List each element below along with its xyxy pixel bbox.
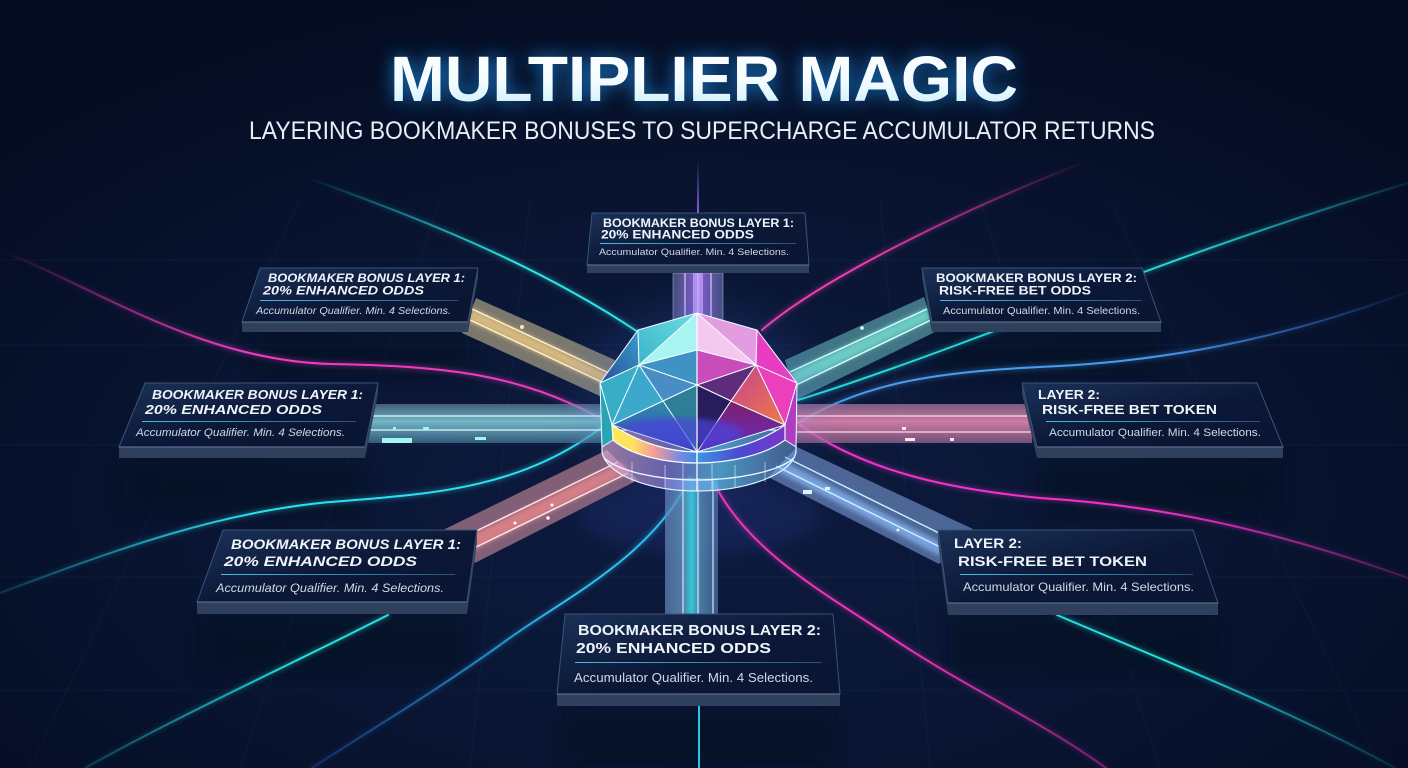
beam sparks (382, 427, 486, 443)
beam: upper left (462, 298, 615, 397)
heading line 2: RISK-FREE BET ODDS (939, 286, 1091, 298)
heading line 2: 20% ENHANCED ODDS (223, 554, 417, 569)
description: Accumulator Qualifier. Min. 4 Selections. (1049, 427, 1261, 439)
curve: cyan bottom stub (698, 706, 700, 768)
glowing curved lines (0, 160, 1408, 768)
description: Accumulator Qualifier. Min. 4 Selections. (215, 581, 444, 595)
heading line 2: 20% ENHANCED ODDS (576, 641, 771, 657)
beam: left (366, 404, 604, 443)
curve: purple top stub (697, 160, 699, 213)
description: Accumulator Qualifier. Min. 4 Selections. (135, 427, 345, 439)
curve: blue lower centre (312, 478, 690, 768)
heading: BOOKMAKER BONUS LAYER 2: (936, 273, 1137, 285)
curve: magenta lower centre (714, 483, 1106, 768)
curve: cyan lower left (0, 425, 605, 593)
central crystal (582, 310, 812, 491)
crystal lower glow (618, 418, 742, 446)
curve: blue right (798, 292, 1408, 423)
floor glow under crystal (580, 477, 820, 553)
crystal glow (582, 310, 812, 480)
subtitle: LAYERING BOOKMAKER BONUSES TO SUPERCHARGE ACCUMULATOR RETURNS (249, 117, 1155, 145)
title glow: MULTIPLIER MAGIC (390, 43, 1018, 115)
description: Accumulator Qualifier. Min. 4 Selections. (599, 247, 789, 258)
beam: upper right (785, 297, 935, 400)
curve: cyan upper left (305, 177, 638, 332)
curve: teal upper right (798, 183, 1408, 400)
description: Accumulator Qualifier. Min. 4 Selections. (943, 306, 1140, 317)
beam: lower left (445, 450, 638, 563)
crystal rim band right (697, 425, 785, 463)
panel: bottom bonus layer (557, 614, 840, 706)
heading line 2: RISK-FREE BET TOKEN (1042, 403, 1217, 417)
panel: top bonus layer (587, 213, 809, 273)
panel: left bonus layer (119, 383, 378, 458)
panel: upper left bonus layer (242, 268, 478, 332)
description: Accumulator Qualifier. Min. 4 Selections. (255, 306, 451, 317)
curve: magenta left (0, 250, 600, 418)
heading: BOOKMAKER BONUS LAYER 1: (603, 218, 794, 230)
beam: lower right (768, 447, 973, 564)
curve: magenta upper right (762, 160, 1090, 330)
panel: lower left bonus layer (197, 530, 477, 614)
heading: BOOKMAKER BONUS LAYER 1: (231, 537, 461, 552)
heading line 2: 20% ENHANCED ODDS (601, 230, 754, 242)
description: Accumulator Qualifier. Min. 4 Selections. (963, 580, 1194, 594)
title: MULTIPLIER MAGIC (390, 43, 1018, 115)
panel: upper right bonus layer (922, 268, 1161, 332)
description: Accumulator Qualifier. Min. 4 Selections. (574, 670, 813, 685)
crystal facets (600, 313, 797, 452)
heading: BOOKMAKER BONUS LAYER 1: (268, 273, 465, 285)
light beams (366, 273, 1032, 614)
curve: cyan far lower right (1057, 615, 1395, 768)
beam: top (673, 273, 723, 329)
heading: LAYER 2: (1038, 388, 1100, 402)
curve: cyan far lower left (85, 615, 388, 768)
beam: right (792, 404, 1032, 443)
heading: BOOKMAKER BONUS LAYER 2: (578, 623, 821, 639)
curve: magenta lower right (800, 425, 1408, 578)
heading: LAYER 2: (954, 536, 1022, 551)
panel: lower right bonus layer (938, 530, 1218, 615)
heading line 2: 20% ENHANCED ODDS (144, 403, 323, 417)
crystal rim band left (612, 425, 697, 463)
heading line 2: RISK-FREE BET TOKEN (958, 554, 1147, 569)
heading line 2: 20% ENHANCED ODDS (262, 286, 424, 298)
heading: BOOKMAKER BONUS LAYER 1: (152, 388, 363, 402)
panel: right bonus layer (1022, 383, 1283, 458)
beam: bottom (665, 478, 718, 614)
crystal base disc (602, 430, 796, 491)
